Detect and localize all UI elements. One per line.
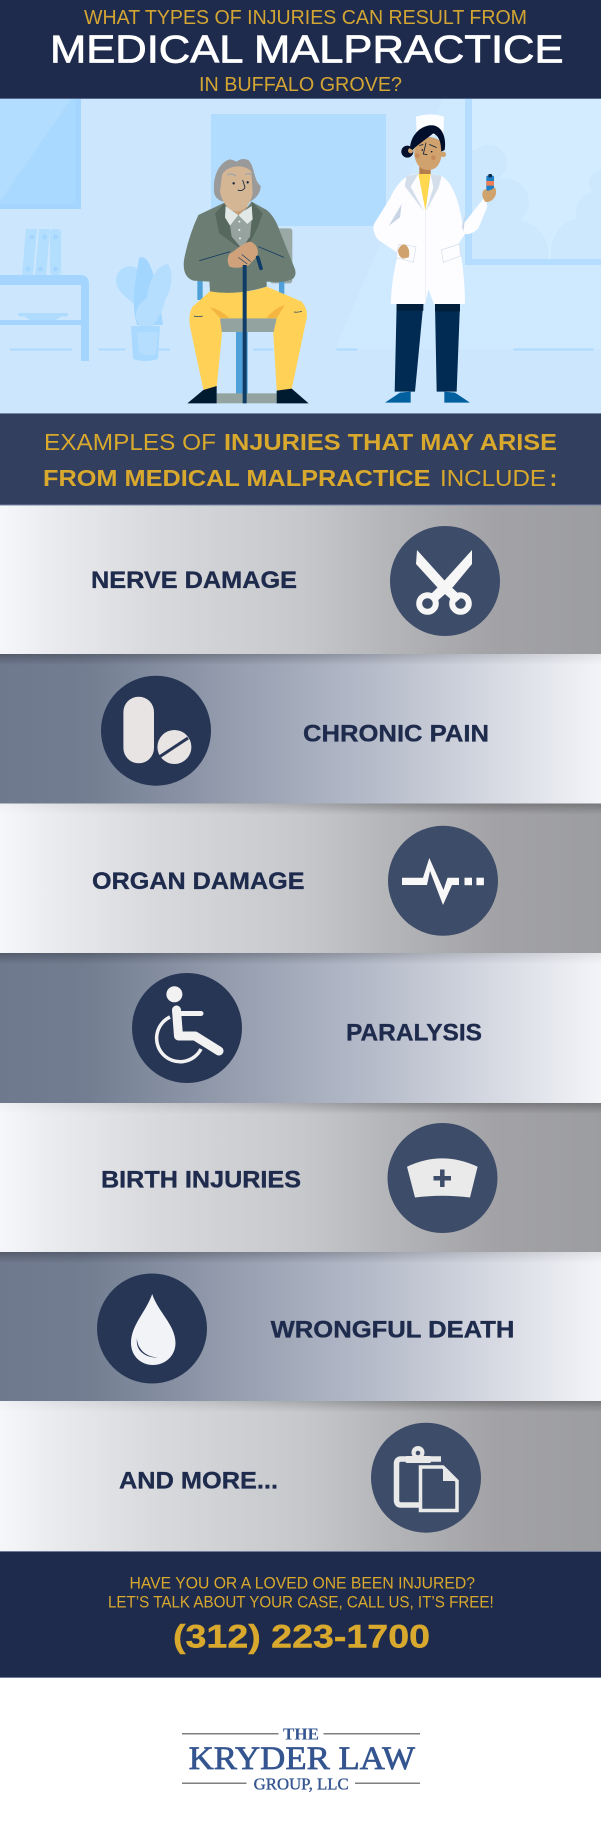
header band	[0, 0, 601, 99]
row: birth injuries	[0, 1103, 601, 1252]
label: nerve damage: NERVE DAMAGE	[91, 567, 297, 594]
jacket	[184, 202, 296, 293]
heading line one: INJURIES THAT MAY ARISE	[224, 429, 557, 455]
background: potted plant	[116, 257, 172, 361]
row: paralysis	[0, 953, 601, 1103]
patient with cane on chair	[184, 159, 309, 403]
background: left window	[0, 99, 81, 209]
footer call to action band	[0, 1551, 601, 1678]
background: centre panel	[211, 114, 386, 226]
label: organ damage: ORGAN DAMAGE	[92, 868, 304, 895]
background: right window with trees	[465, 99, 601, 265]
bottle in raised hand	[482, 174, 496, 202]
shoes	[187, 386, 309, 403]
heading line one: EXAMPLES OF	[44, 429, 216, 455]
label: and more: AND MORE...	[119, 1468, 278, 1495]
yellow blouse	[418, 174, 431, 212]
logo: The Kryder Law Group, LLC	[0, 1678, 601, 1836]
heading line one	[44, 429, 557, 455]
label: chronic pain: CHRONIC PAIN	[303, 721, 489, 748]
heading line two: :	[550, 465, 557, 491]
call to action line two: LET’S TALK ABOUT YOUR CASE, CALL US, IT’S FREE!	[108, 1593, 494, 1611]
icon: heartbeat pulse	[388, 826, 498, 936]
heading line two: INCLUDE	[440, 465, 546, 491]
nurse cap	[416, 114, 444, 135]
chair	[197, 228, 292, 403]
section heading band	[0, 413, 601, 506]
header line three: IN BUFFALO GROVE?	[199, 74, 402, 96]
hands	[228, 242, 258, 268]
white coat	[373, 174, 487, 304]
logo text: the: THE	[283, 1724, 319, 1743]
icon: scissors	[390, 526, 500, 636]
phone number: (312) 223-1700	[173, 1618, 430, 1654]
background: floor lines	[10, 348, 594, 350]
header line one: WHAT TYPES OF INJURIES CAN RESULT FROM	[84, 7, 527, 29]
heading line two	[43, 465, 557, 491]
logo text: kryder law: KRYDER LAW	[189, 1741, 416, 1777]
row: organ damage	[0, 804, 601, 953]
icon: wheelchair	[132, 973, 242, 1083]
row: chronic pain	[0, 654, 601, 804]
row: nerve damage	[0, 506, 601, 654]
head and hair	[214, 159, 261, 211]
nurse shoes	[385, 392, 470, 403]
label: paralysis: PARALYSIS	[346, 1020, 482, 1047]
row: and more	[0, 1401, 601, 1551]
heading line two: FROM MEDICAL MALPRACTICE	[43, 465, 431, 491]
trousers	[189, 287, 307, 391]
nurse head	[401, 125, 446, 176]
icon: pills	[101, 676, 211, 786]
call to action line one: HAVE YOU OR A LOVED ONE BEEN INJURED?	[130, 1575, 475, 1593]
icon: drop	[97, 1274, 207, 1384]
icon: nurse cap	[388, 1123, 498, 1233]
logo text: group llc: GROUP, LLC	[254, 1774, 349, 1793]
nurse holding bottle	[373, 114, 496, 403]
nurse trousers	[395, 304, 460, 392]
main title: MEDICAL MALPRACTICE	[50, 28, 564, 72]
label: birth injuries: BIRTH INJURIES	[101, 1167, 301, 1194]
illustration: patient and nurse in a clinic room	[0, 99, 601, 413]
row: wrongful death	[0, 1252, 601, 1401]
label: wrongful death: WRONGFUL DEATH	[271, 1317, 514, 1344]
cane	[243, 257, 261, 403]
nurse hand on pocket	[398, 244, 409, 259]
background: shelf with binders and plate	[0, 229, 89, 361]
icon: clipboard and document	[371, 1423, 481, 1533]
